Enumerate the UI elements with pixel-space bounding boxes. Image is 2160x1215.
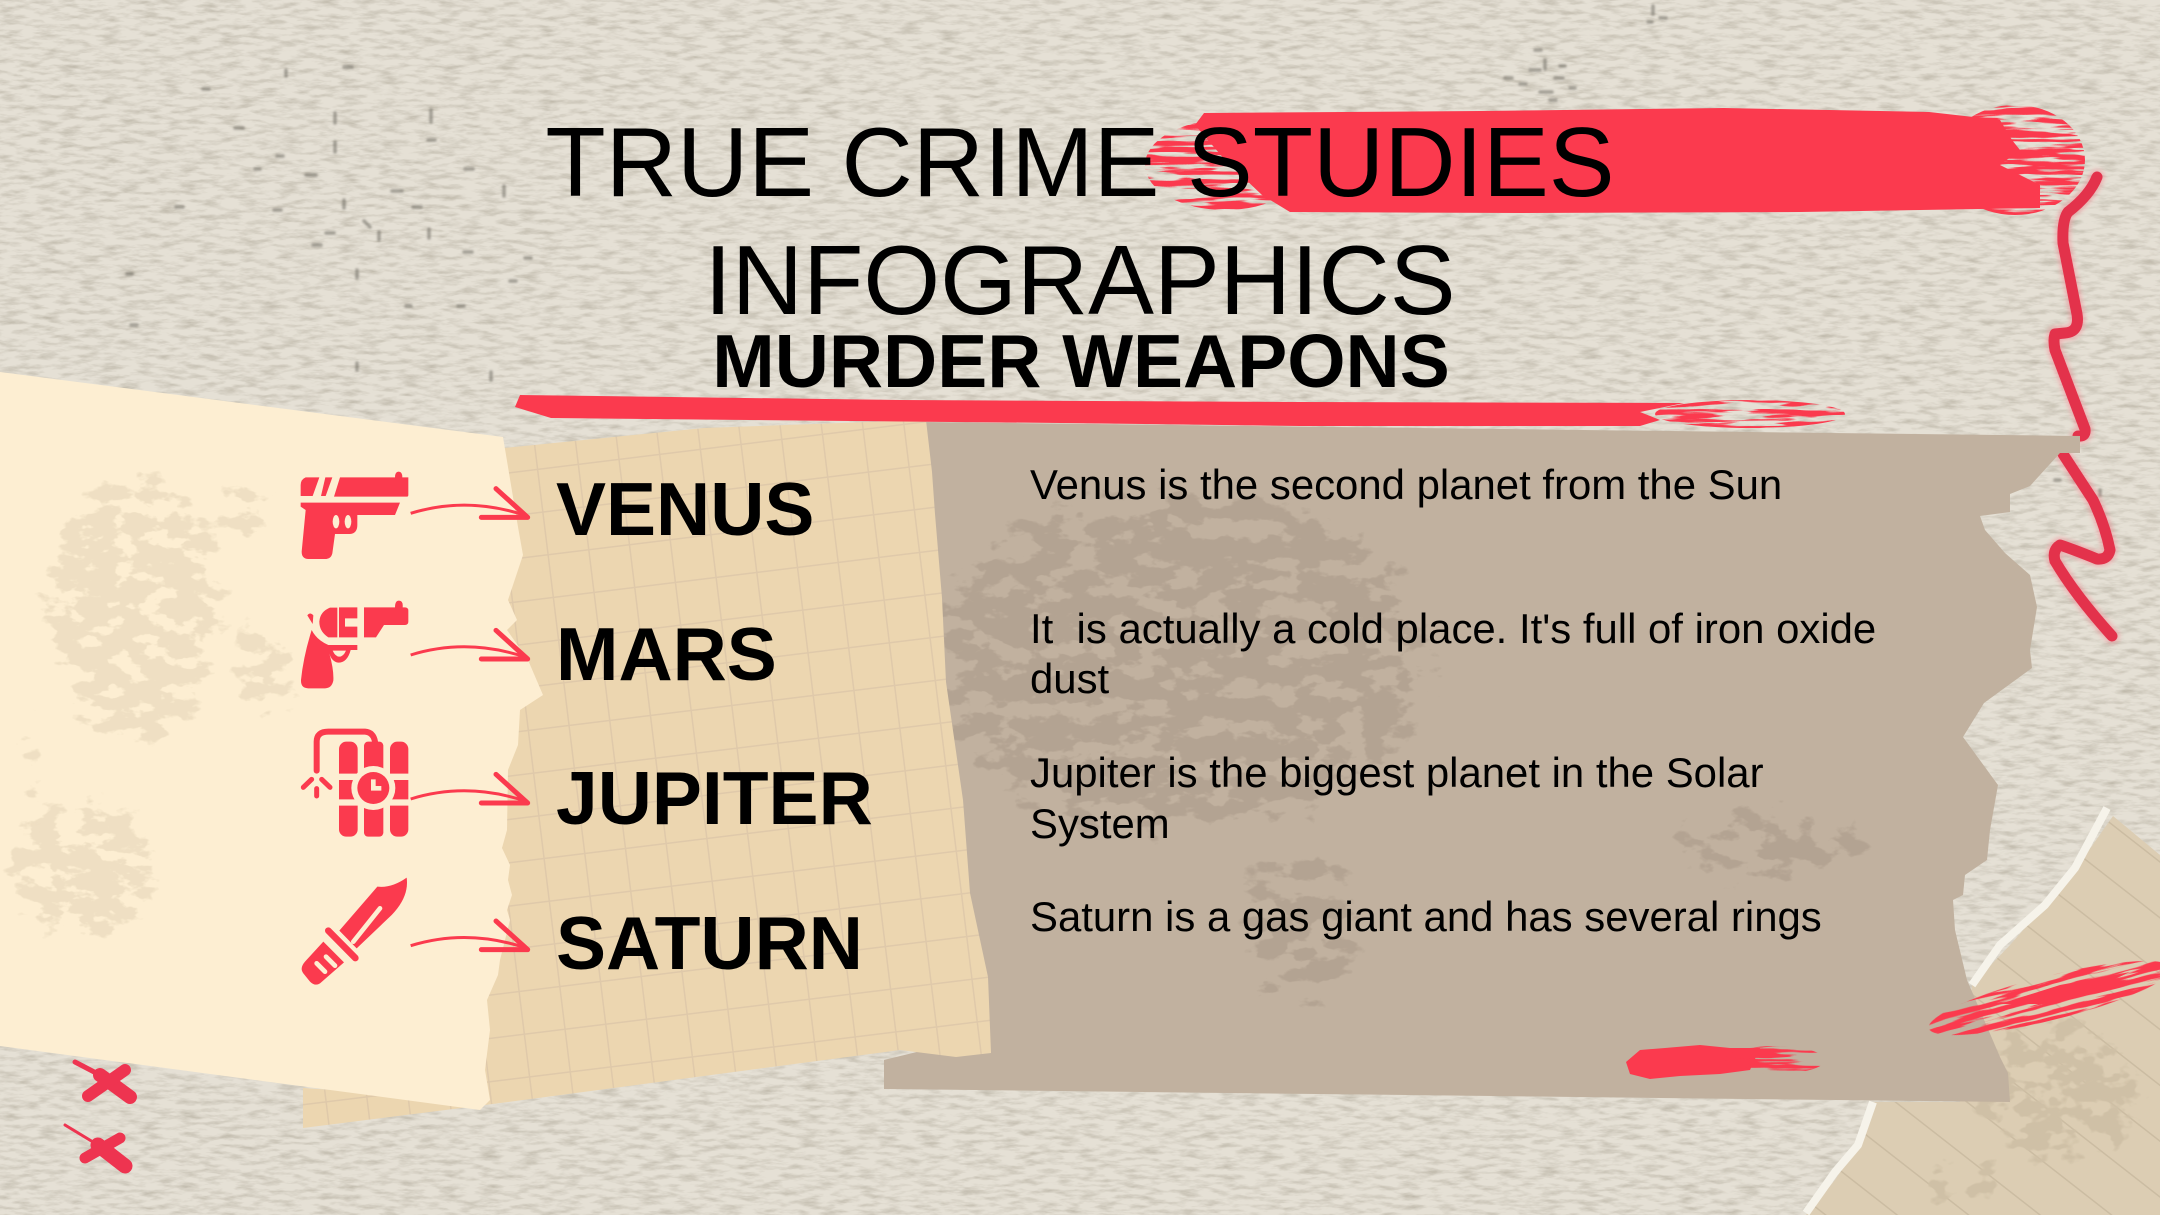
arrow (411, 774, 528, 803)
description: Saturn is a gas giant and has several rings (1030, 893, 1822, 940)
red brush mark, bottom right (1626, 946, 2160, 1079)
arrow (411, 489, 528, 517)
description: System (1030, 800, 1170, 847)
row: Venus (301, 461, 1782, 559)
cross 2 (65, 1125, 125, 1166)
panel: grid paper (303, 420, 991, 1128)
label: JUPITER (556, 756, 873, 840)
title: INFOGRAPHICS (704, 225, 1456, 335)
red squiggle (2054, 177, 2112, 636)
description: Jupiter is the biggest planet in the Solar (1030, 749, 1764, 796)
description (1030, 605, 1876, 702)
title: TRUE CRIME STUDIES (545, 107, 1615, 217)
subtitle: MURDER WEAPONS (712, 319, 1450, 403)
icon: pistol (301, 472, 408, 559)
red cross marks (65, 1062, 130, 1166)
description (1030, 749, 1764, 847)
icon: knife (302, 878, 407, 985)
brush underline (515, 395, 1845, 428)
description: Venus is the second planet from the Sun (1030, 461, 1782, 508)
label: VENUS (556, 467, 814, 551)
arrow (411, 630, 528, 659)
description: It is actually a cold place. It's full of iron oxide (1030, 605, 1876, 652)
label: MARS (556, 612, 777, 696)
icon: revolver (301, 601, 408, 688)
description: dust (1030, 655, 1110, 702)
torn striped paper, bottom right (1806, 808, 2160, 1215)
cross 1 (75, 1062, 130, 1097)
arrow (411, 921, 528, 950)
panel: descriptions torn sheet (884, 422, 2080, 1102)
title (545, 107, 1615, 335)
row: Saturn (302, 878, 1822, 985)
row: Jupiter (303, 732, 1764, 847)
background grunge specks (127, 6, 2100, 495)
icon: dynamite (303, 732, 410, 837)
label: SATURN (556, 901, 863, 985)
brush stroke behind title (1145, 105, 2085, 215)
row: Mars (301, 601, 1876, 702)
panel: cream torn paper (0, 372, 543, 1110)
